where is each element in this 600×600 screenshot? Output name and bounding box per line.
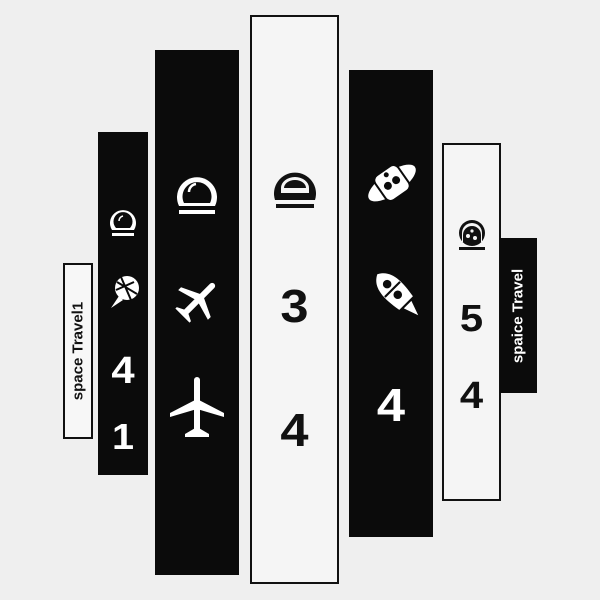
- label box: spaice Travel: spaice Travel: [510, 269, 526, 363]
- icon: satellite: [111, 276, 139, 308]
- bar 1: [98, 132, 148, 475]
- number 3: 3: [280, 280, 309, 332]
- icon: moon helmet: [459, 220, 485, 250]
- icon: helmet: [177, 177, 217, 214]
- bar 2: [155, 50, 239, 575]
- number 4: 4: [111, 350, 135, 392]
- icon: helmet small: [110, 210, 136, 236]
- icon: rocket: [376, 273, 418, 316]
- number 1: 1: [112, 416, 134, 457]
- bar 3: [250, 15, 339, 584]
- number 4: 4: [377, 379, 405, 431]
- number 4: 4: [280, 404, 309, 456]
- icon: planet rocket: [368, 164, 416, 202]
- bar 5: [442, 143, 501, 501]
- icon: plane diagonal: [176, 282, 216, 323]
- number 5: 5: [460, 298, 483, 340]
- label box: spaice Travel: [500, 238, 537, 393]
- number 4: 4: [460, 375, 483, 417]
- icon: helmet: [274, 172, 316, 208]
- label box: space Travel1: [63, 263, 93, 439]
- icon: plane vertical: [170, 377, 224, 437]
- label box: space Travel1: space Travel1: [70, 302, 86, 400]
- bar 4: [349, 70, 433, 537]
